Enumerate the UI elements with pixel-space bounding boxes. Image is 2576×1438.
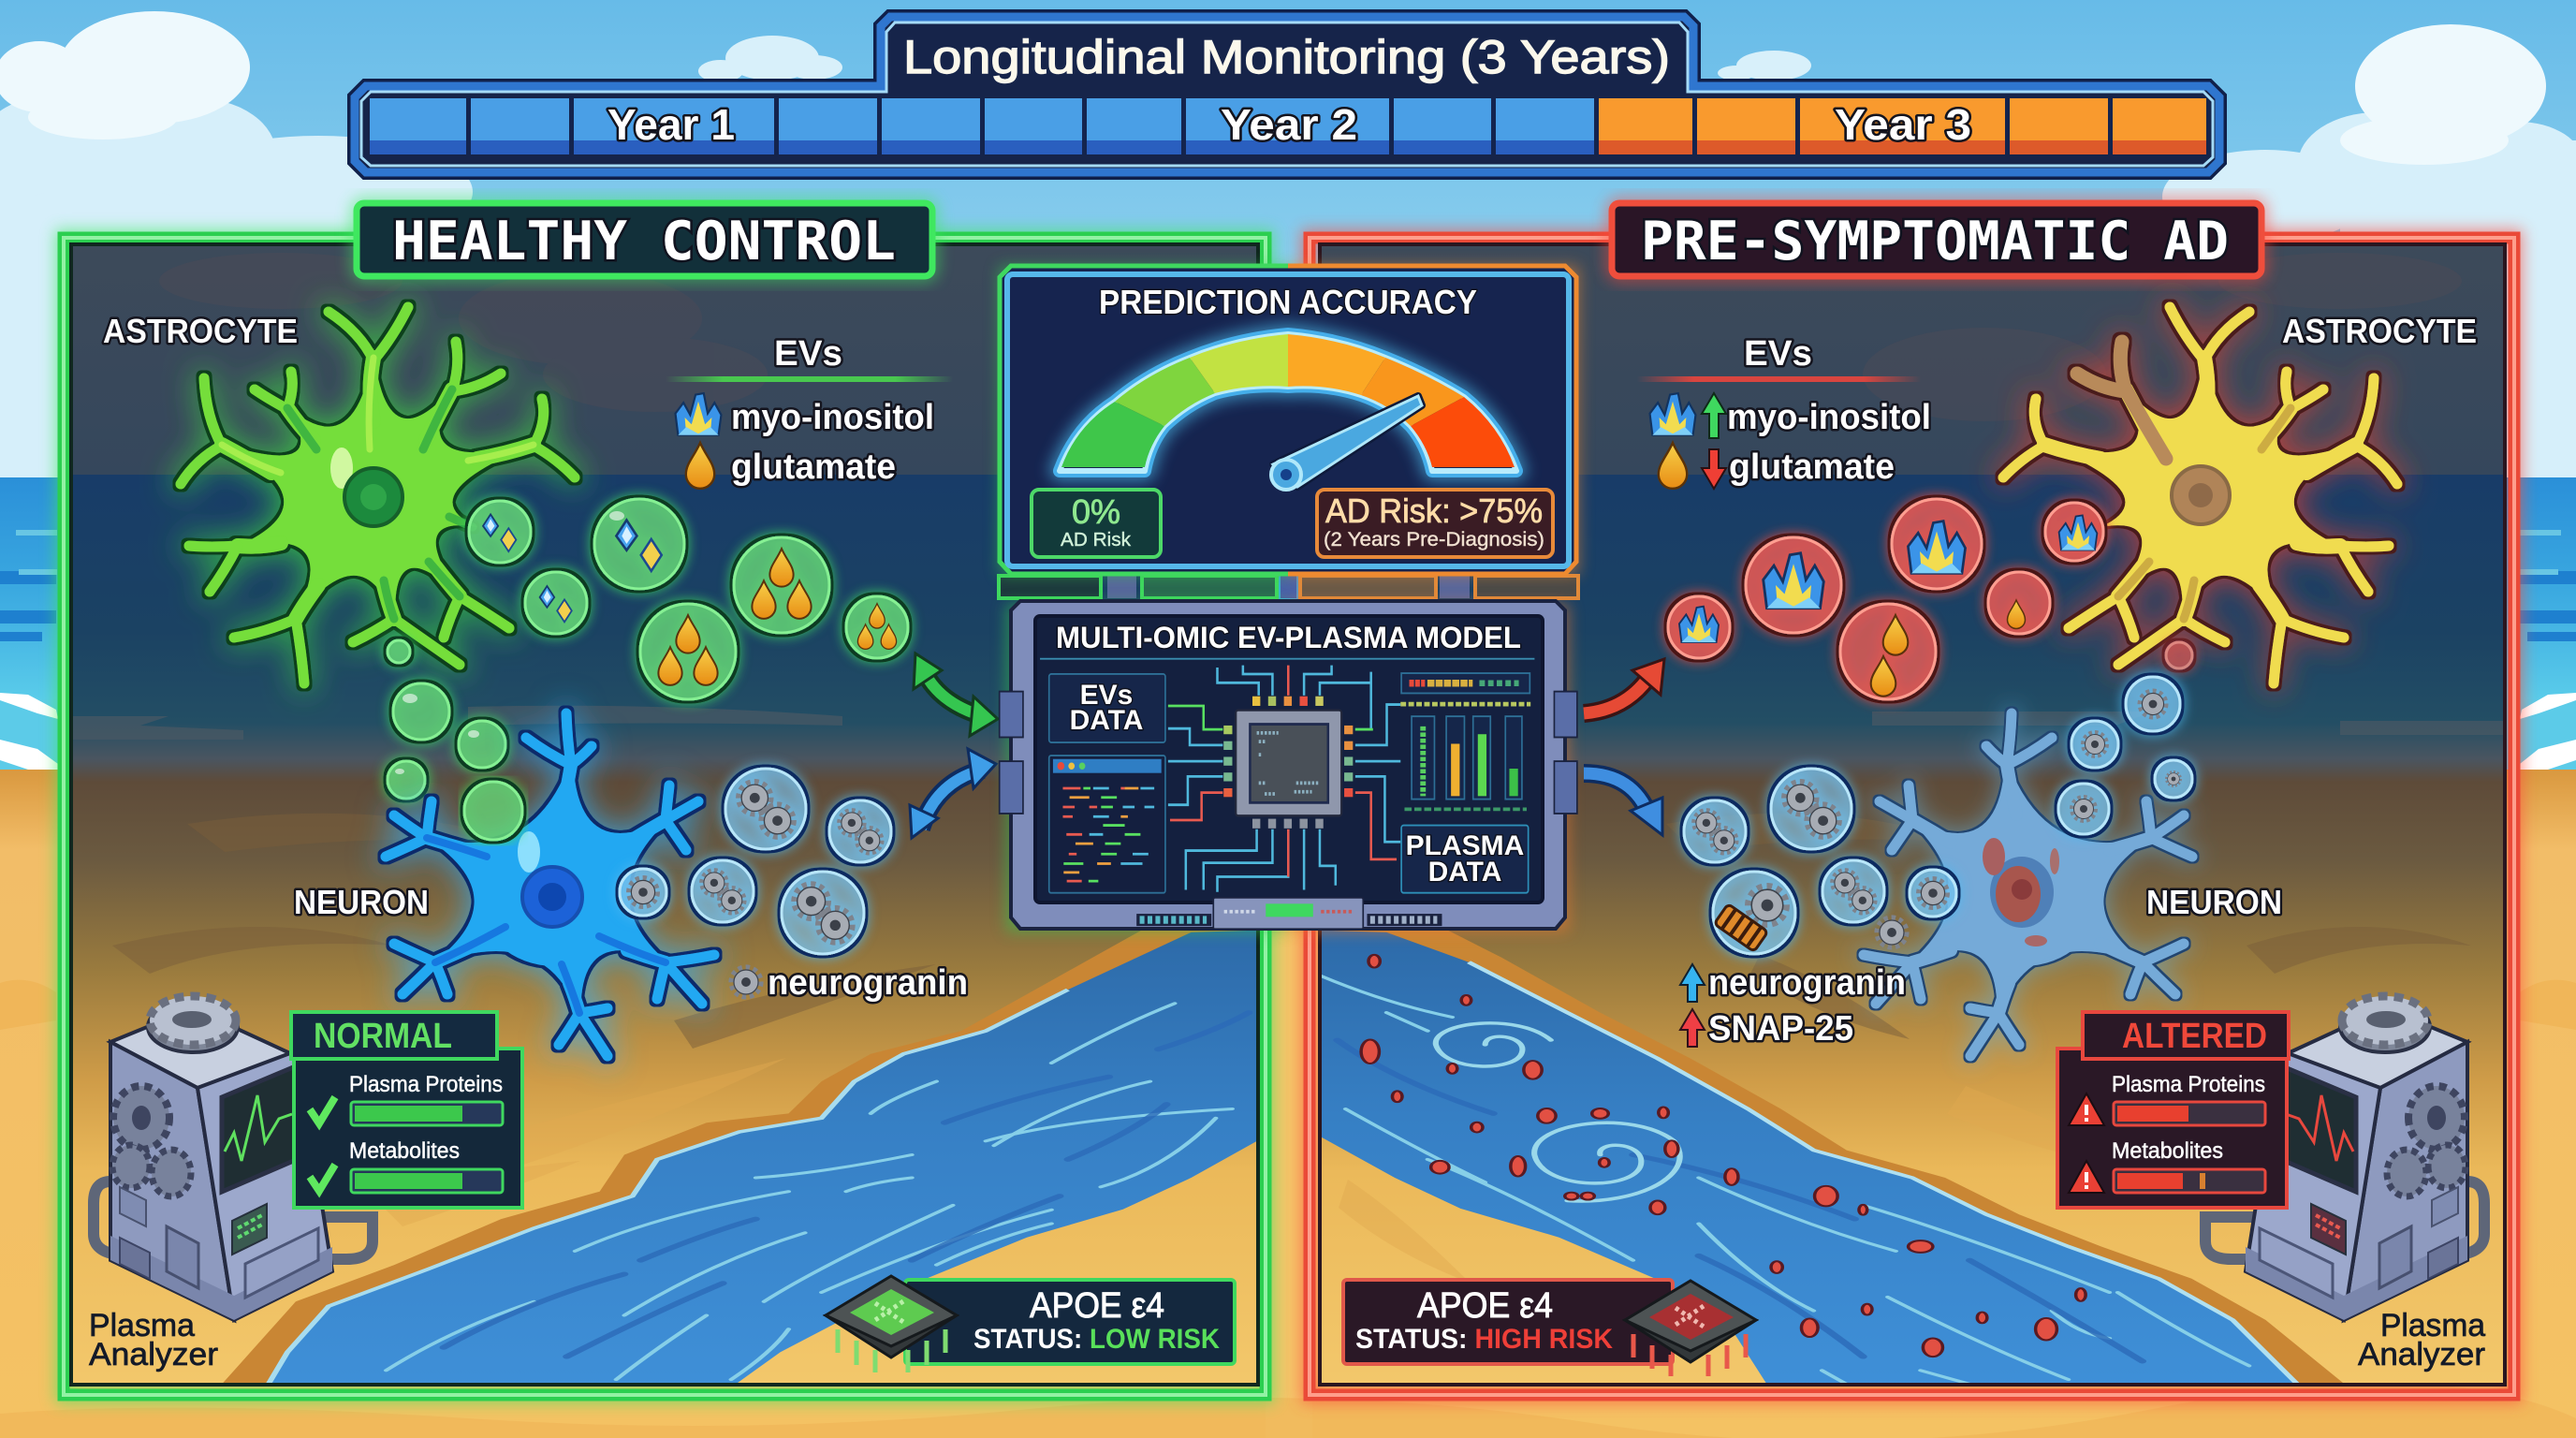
EVs DATA label: EVs xyxy=(1080,680,1133,711)
analyzer: right xyxy=(2205,996,2484,1320)
panel scene: left xyxy=(66,239,1266,1393)
circuit artwork xyxy=(1000,658,1577,929)
LED strip xyxy=(1401,673,1530,693)
bar: plasma proteins xyxy=(351,1102,503,1125)
label: neuron left: NEURON xyxy=(294,883,429,921)
model metal frame xyxy=(1011,601,1565,929)
EVs heading: EVs xyxy=(1744,334,1812,374)
connector between gauge and model xyxy=(999,576,1578,598)
status plate xyxy=(1343,1280,1673,1364)
year 2 label: Year 2 xyxy=(1221,100,1357,149)
APOE text: APOE ε4 xyxy=(1030,1286,1164,1326)
EV bubbles: gears right xyxy=(1684,677,2192,954)
heading: pre-symptomatic AD xyxy=(1612,203,2261,276)
panel: pre-symptomatic AD xyxy=(1310,238,2514,1395)
EVs DATA label: DATA xyxy=(1070,705,1143,736)
banner light trim xyxy=(361,22,2213,166)
year 3 label: Year 3 xyxy=(1835,100,1971,149)
heading text: HEALTHY CONTROL xyxy=(392,211,896,272)
glutamate label: glutamate xyxy=(1729,448,1895,487)
EV bubbles: gears left xyxy=(620,769,891,954)
EVs heading: EVs xyxy=(774,334,842,374)
callout: AD Risk above 75%: (2 Years Pre-Diagnosis) xyxy=(1324,529,1544,550)
arrow: up red xyxy=(1680,1009,1705,1047)
EVs rule xyxy=(666,376,953,382)
panel scene: right xyxy=(1310,239,2513,1393)
icon: warning xyxy=(2069,1093,2104,1125)
bar: metabolites xyxy=(2114,1169,2265,1193)
callout: 0% AD Risk xyxy=(1032,490,1161,557)
NORMAL text: NORMAL xyxy=(314,1017,452,1056)
icon: crystal xyxy=(1650,393,1695,435)
arrow: red to astrocyte EVs xyxy=(1584,659,1664,713)
PLASMA DATA label xyxy=(1406,830,1524,888)
callout: AD Risk above 75%: AD Risk: >75% xyxy=(1325,492,1543,530)
Plasma Proteins label: Plasma Proteins xyxy=(2112,1072,2265,1097)
model panel: multi-omic EV-plasma xyxy=(1000,601,1577,932)
icon: check xyxy=(310,1097,335,1123)
heading text: PRE-SYMPTOMATIC AD xyxy=(1641,211,2229,272)
callout: 0% AD Risk: 0% xyxy=(1072,492,1120,531)
machine trace xyxy=(2286,1095,2353,1161)
Metabolites label: Metabolites xyxy=(349,1138,460,1164)
heading: healthy control xyxy=(357,203,932,276)
legend: EVs right xyxy=(1637,334,1931,489)
panel: healthy control xyxy=(64,238,1266,1395)
gauge panel glow green xyxy=(999,266,1289,575)
label: astrocyte right: ASTROCYTE xyxy=(2282,312,2477,350)
inner frame edge xyxy=(1320,244,2505,1385)
label: plasma analyzer left xyxy=(89,1308,218,1372)
label: astrocyte left: ASTROCYTE xyxy=(103,312,298,350)
EVs DATA label xyxy=(1070,680,1143,736)
banner blue trim xyxy=(355,17,2219,172)
heading glow xyxy=(357,203,932,276)
gauge panel: prediction accuracy xyxy=(999,266,1579,575)
code window xyxy=(1049,756,1165,893)
neuron AD xyxy=(1864,713,2192,1056)
machine buttons xyxy=(2311,1204,2346,1255)
label: neurogranin and SNAP-25 xyxy=(1680,963,1906,1049)
PLASMA DATA label: DATA xyxy=(1428,857,1501,888)
gauge panel glow orange xyxy=(1289,266,1579,575)
arrow: blue neuron to model xyxy=(910,749,996,838)
Plasma Proteins label: Plasma Proteins xyxy=(349,1072,503,1097)
label: plasma analyzer right: Plasma xyxy=(2380,1308,2485,1343)
status tab xyxy=(291,1012,497,1059)
machine trace xyxy=(225,1095,292,1161)
status tab xyxy=(2083,1012,2289,1059)
label: plasma analyzer right: Analyzer xyxy=(2358,1337,2485,1372)
title text: Longitudinal Monitoring (3 Years) xyxy=(903,31,1670,83)
legend: EVs left xyxy=(666,334,953,489)
status text: STATUS: LOW RISK xyxy=(973,1324,1220,1355)
inner frame edge xyxy=(71,244,1258,1385)
model glow green xyxy=(1006,604,1287,932)
swirl xyxy=(1436,1023,1680,1201)
gauge title: PREDICTION ACCURACY xyxy=(1099,283,1477,321)
heading plate xyxy=(357,203,932,276)
gauge panel frame orange xyxy=(1288,266,1576,574)
analyzer: left xyxy=(94,996,373,1320)
gauge panel inner xyxy=(1007,274,1569,566)
Metabolites label: Metabolites xyxy=(2112,1138,2223,1164)
label: plasma analyzer right xyxy=(2358,1308,2485,1372)
gauge panel frame green xyxy=(1000,266,1288,574)
status text: STATUS: HIGH RISK xyxy=(1355,1324,1613,1355)
panel glow xyxy=(1310,238,2514,1395)
EV bubble over neuron xyxy=(464,782,522,840)
icon: check xyxy=(310,1165,335,1191)
PLASMA DATA label: PLASMA xyxy=(1406,830,1524,861)
arrow: down red xyxy=(1702,449,1726,489)
timeline track xyxy=(370,98,2206,154)
gauge dial xyxy=(1060,334,1516,471)
icon: chip xyxy=(1625,1281,1756,1376)
model glow orange xyxy=(1288,604,1569,932)
arrow: blue to neuron EVs xyxy=(1584,773,1662,835)
banner frame xyxy=(355,17,2219,172)
EVs data box xyxy=(1049,674,1165,742)
bar chart xyxy=(1412,716,1522,800)
status panel: normal xyxy=(291,1012,522,1208)
machine buttons xyxy=(232,1204,267,1255)
callout: AD Risk above 75% xyxy=(1317,490,1553,557)
label: plasma analyzer left: Analyzer xyxy=(89,1337,218,1372)
arrow: green astrocyte to model xyxy=(914,653,998,736)
heading glow xyxy=(1612,203,2261,276)
debris xyxy=(1361,955,2086,1357)
callout: 0% AD Risk: AD Risk xyxy=(1061,530,1132,550)
clouds left xyxy=(0,11,842,477)
decorative highlight line xyxy=(64,238,1266,1395)
status body xyxy=(2057,1049,2287,1208)
EVs rule xyxy=(1637,376,1921,382)
neurogranin text: neurogranin xyxy=(768,963,968,1003)
clouds right xyxy=(1718,24,2576,477)
machine body xyxy=(94,996,373,1320)
plasma data box xyxy=(1401,826,1529,893)
gauge needle xyxy=(1271,396,1422,490)
year 1 label: Year 1 xyxy=(607,100,735,149)
machine body xyxy=(2205,996,2484,1320)
console xyxy=(1136,914,1211,926)
decorative highlight line xyxy=(1310,238,2514,1395)
label: plasma analyzer left: Plasma xyxy=(89,1308,195,1343)
neurogranin text: neurogranin xyxy=(1708,963,1906,1003)
astrocyte AD xyxy=(2003,307,2397,683)
bar: plasma proteins xyxy=(2114,1102,2265,1125)
icon: droplet xyxy=(1659,443,1687,489)
neuron healthy xyxy=(386,713,714,1056)
EV bubbles: crystal and droplet right xyxy=(1668,499,2192,699)
status plate xyxy=(905,1280,1235,1364)
label: neurogranin left xyxy=(732,963,968,1003)
processor chip xyxy=(1236,711,1341,815)
EV bubbles: crystal and droplet left xyxy=(388,499,908,799)
icon: chip xyxy=(826,1276,957,1372)
arrow: up green xyxy=(1702,393,1726,438)
myo-inositol label: myo-inositol xyxy=(731,398,934,437)
APOE status: low risk xyxy=(826,1276,1235,1372)
model title: MULTI-OMIC EV-PLASMA MODEL xyxy=(1056,621,1521,654)
astrocyte healthy xyxy=(181,307,575,683)
pins xyxy=(1223,696,1354,829)
icon: gear xyxy=(732,968,760,996)
title banner xyxy=(355,17,2219,172)
heading plate xyxy=(1612,203,2261,276)
ALTERED text: ALTERED xyxy=(2122,1017,2267,1056)
arrow: up cyan xyxy=(1680,964,1705,1002)
APOE status: high risk xyxy=(1343,1280,1756,1376)
glutamate label: glutamate xyxy=(731,448,896,487)
APOE text: APOE ε4 xyxy=(1417,1286,1553,1326)
side clamps xyxy=(1000,692,1577,814)
label: neuron right: NEURON xyxy=(2146,883,2282,921)
icon: warning xyxy=(2069,1161,2104,1193)
SNAP-25 text: SNAP-25 xyxy=(1708,1009,1853,1049)
myo-inositol label: myo-inositol xyxy=(1727,398,1931,437)
status panel: altered xyxy=(2057,1012,2289,1208)
bar: metabolites xyxy=(351,1169,503,1193)
icon: crystal xyxy=(676,393,721,435)
model screen xyxy=(1035,616,1543,902)
icon: loose gear xyxy=(1878,917,1906,947)
panel glow and frame xyxy=(64,238,1266,1395)
icon: droplet xyxy=(686,443,714,489)
status body xyxy=(294,1049,522,1208)
